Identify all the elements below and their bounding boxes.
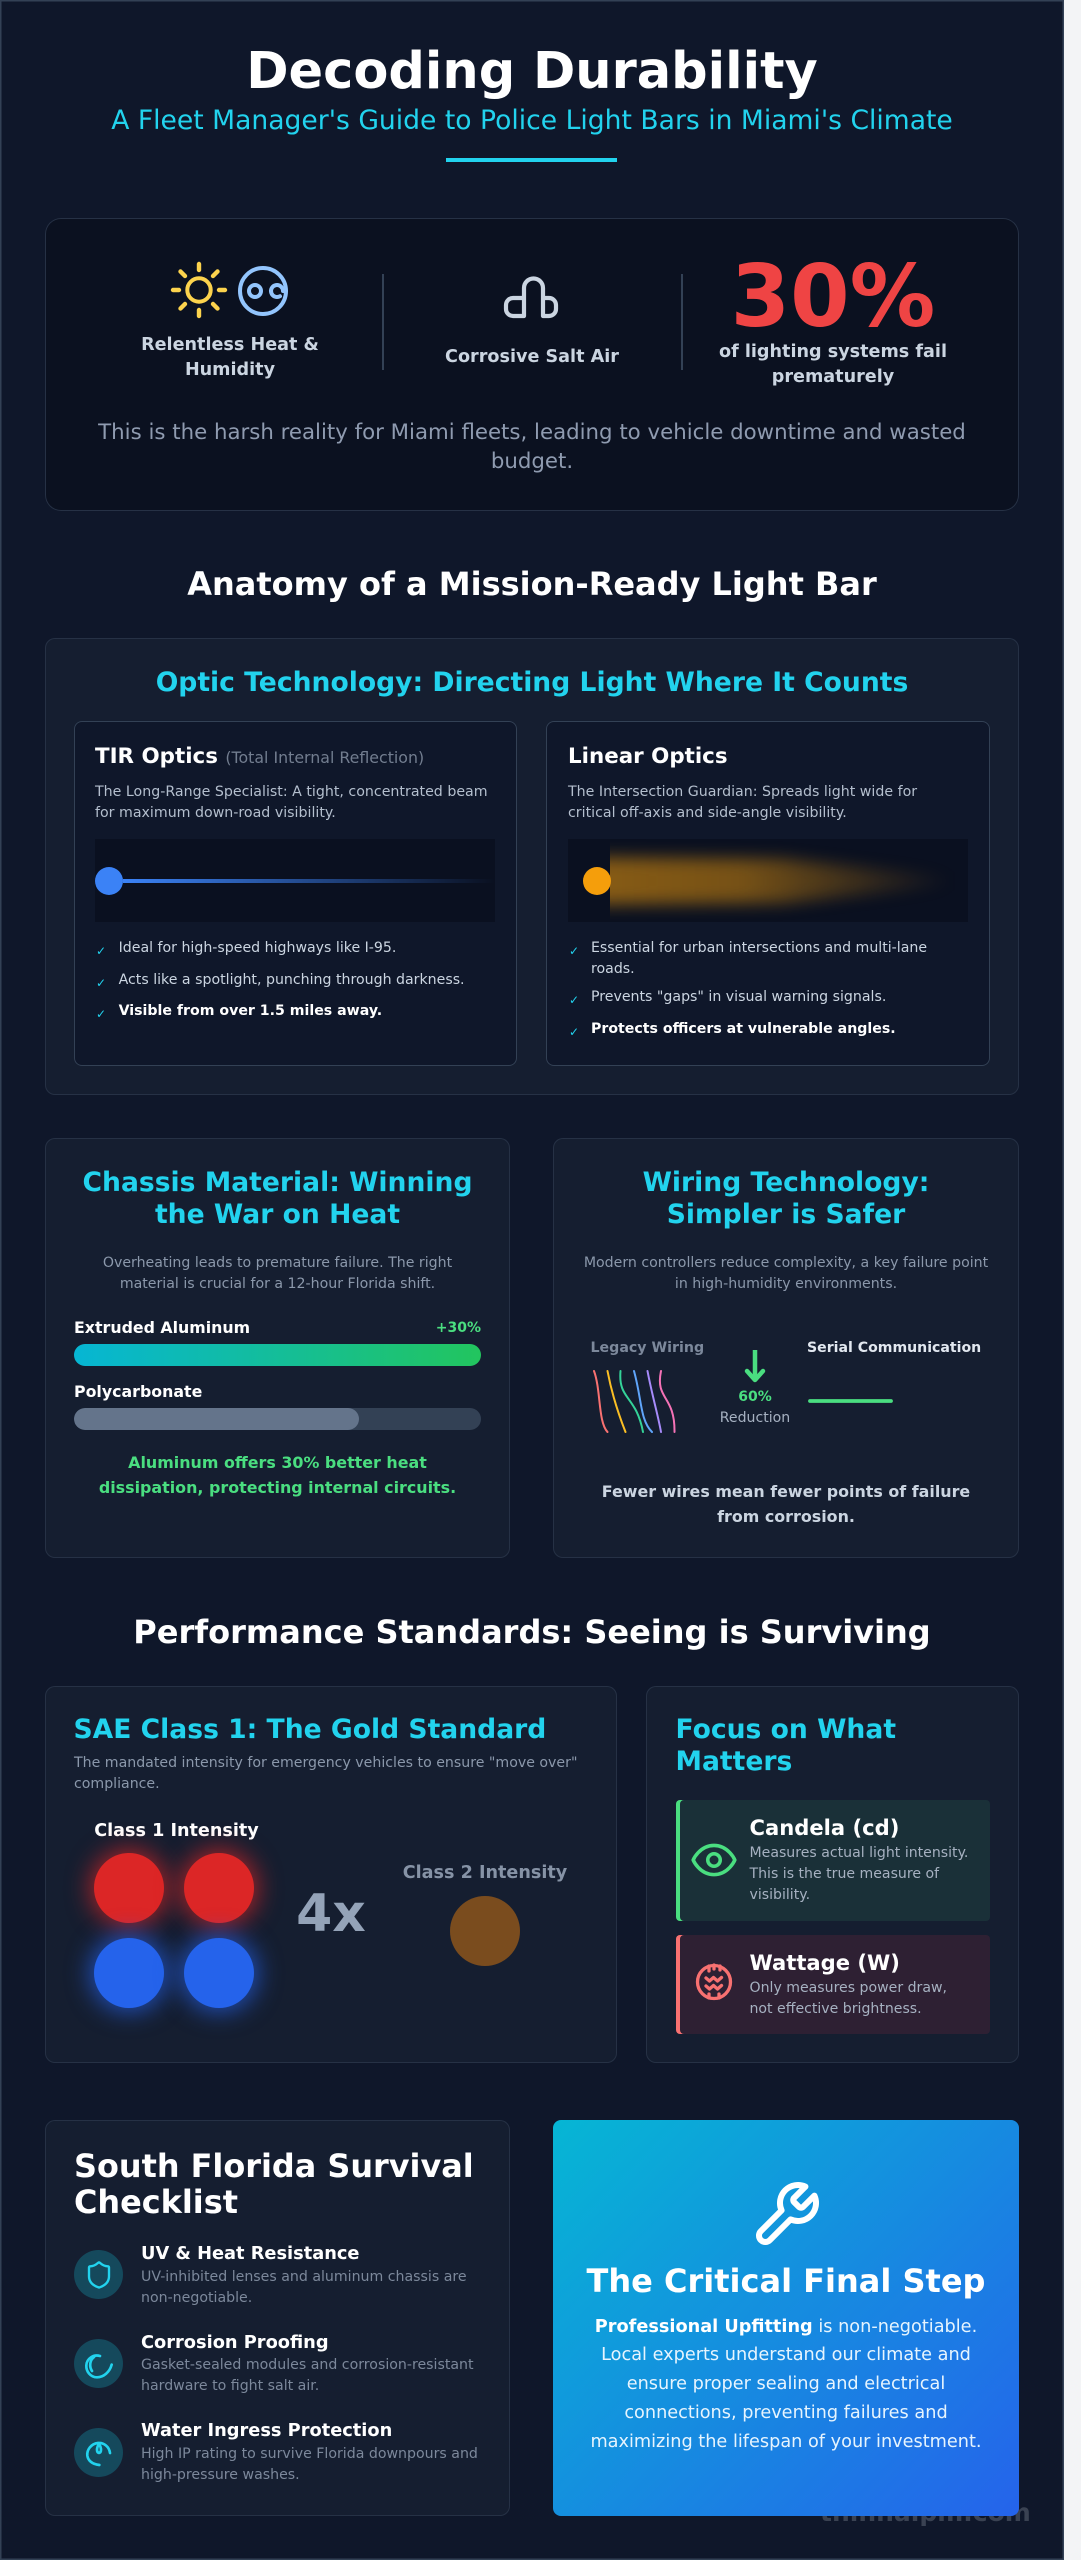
bar label: aluminum: Extruded Aluminum (74, 1318, 250, 1336)
label: heat: Humidity (185, 360, 275, 380)
label: salt: Corrosive Salt Air (445, 347, 619, 367)
multiplier: 4x (296, 1884, 366, 1944)
panel description (74, 1754, 577, 1792)
stat: 60 percent: 60% (738, 1389, 772, 1405)
text: Measures actual light intensity. (750, 1845, 968, 1861)
panel heading: Optic Technology: Directing Light Where It Counts (156, 667, 908, 698)
callout (99, 1453, 456, 1497)
divider (382, 274, 384, 370)
card: linear optics (546, 720, 990, 1066)
card description: for maximum down-road visibility. (95, 805, 336, 821)
callout: Fewer wires mean fewer points of failure (602, 1482, 970, 1501)
card description: critical off-axis and side-angle visibility. (568, 805, 847, 821)
light: class 2 (450, 1896, 520, 1966)
beam diagram: narrow (95, 839, 495, 922)
light group: class 1 (74, 1832, 274, 2028)
stat: 30 percent: 30% (731, 248, 935, 346)
text: UV: non-negotiable. (141, 2290, 252, 2306)
text: UV (141, 2269, 467, 2306)
panel description: material is crucial for a 12-hour Florida shift. (120, 1276, 435, 1292)
panel: critical final step (553, 2120, 1019, 2516)
check: ✓ (569, 993, 579, 1007)
text: corrosion: Gasket-sealed modules and corrosion-resistant (141, 2357, 474, 2373)
card: candela (676, 1800, 990, 1921)
panel heading: The Critical Final Step (587, 2262, 985, 2300)
watermark: thinhaipm.com (820, 2498, 1031, 2527)
check list (569, 940, 927, 1039)
card description (568, 784, 918, 821)
title: water: Water Ingress Protection (141, 2420, 392, 2441)
check: ✓ (96, 944, 106, 958)
panel heading (676, 1714, 896, 1777)
panel: wiring technology (553, 1138, 1019, 1558)
panel heading: Focus on What (676, 1714, 896, 1745)
panel heading: Matters (676, 1746, 792, 1777)
panel heading: Chassis Material: Winning (82, 1167, 472, 1198)
text: not effective brightness. (750, 2001, 922, 2017)
item: Prevents "gaps" in visual warning signals. (591, 989, 886, 1005)
check: ✓ (569, 944, 579, 958)
label: class 2: Class 2 Intensity (403, 1863, 567, 1883)
bar value: +30% (436, 1320, 481, 1336)
bar label: polycarbonate: Polycarbonate (74, 1382, 202, 1400)
label: serial communication: Serial Communication (807, 1340, 981, 1356)
panel: chassis material (45, 1138, 510, 1558)
text: water: high-pressure washes. (141, 2467, 300, 2483)
item: Essential for urban intersections and multi-lane (591, 940, 927, 956)
item: Visible from over 1.5 miles away. (119, 1003, 382, 1019)
panel: SAE class 1 (45, 1686, 617, 2063)
blue light (94, 1938, 164, 2008)
panel description: Modern controllers reduce complexity, a key failure point (584, 1255, 988, 1271)
panel heading: South Florida Survival (74, 2147, 474, 2185)
panel heading: SAE Class 1: The Gold Standard (74, 1714, 546, 1745)
card title: TIR Optics (Total Internal Reflection) (95, 744, 424, 769)
text (750, 1980, 947, 2017)
blue light (184, 1938, 254, 2008)
divider (681, 274, 682, 370)
red light (184, 1853, 254, 1923)
heading: performance: Performance Standards: Seeing is Surviving (133, 1613, 931, 1651)
body text: maximizing the lifespan of your investment. (590, 2432, 982, 2452)
check: ✓ (96, 1007, 106, 1021)
summary text (98, 420, 966, 474)
heading: anatomy: Anatomy of a Mission-Ready Light Bar (187, 565, 877, 603)
check: ✓ (569, 1025, 579, 1039)
icon: salt air (504, 276, 558, 318)
label: legacy wiring: Legacy Wiring (590, 1340, 704, 1356)
body text: ensure proper sealing and electrical (627, 2374, 945, 2394)
label: class 1: Class 1 Intensity (94, 1821, 259, 1841)
stat caption (719, 342, 947, 386)
check list (96, 940, 465, 1021)
arrow: reduction (747, 1350, 763, 1380)
callout: from corrosion. (717, 1507, 855, 1526)
item: roads. (591, 961, 635, 977)
text: corrosion (141, 2357, 474, 2394)
panel: focus on what matters (646, 1686, 1019, 2063)
card title: Linear Optics (568, 744, 728, 769)
summary text: budget. (491, 448, 573, 474)
panel heading (74, 2147, 474, 2221)
body text: Professional Upfitting is non-negotiable. (595, 2316, 977, 2336)
card: TIR optics (74, 720, 517, 1066)
title: Decoding Durability (246, 42, 818, 101)
icon: eye (691, 1844, 737, 1876)
card: wattage (676, 1935, 990, 2034)
check: ✓ (96, 976, 106, 990)
title: UV: UV & Heat Resistance (141, 2243, 360, 2264)
serial line (810, 1399, 891, 1403)
icon: wattage (696, 1963, 732, 2000)
panel heading (82, 1167, 472, 1230)
text: Only measures power draw, (750, 1980, 947, 1996)
legacy wires (594, 1371, 675, 1432)
panel heading: the War on Heat (155, 1199, 400, 1230)
callout (602, 1482, 970, 1526)
card description: The Intersection Guardian: Spreads light wide for (568, 784, 917, 800)
stat caption: Reduction (720, 1410, 790, 1426)
bar: polycarbonate (74, 1408, 481, 1430)
accent line (446, 158, 617, 162)
panel description: The mandated intensity for emergency vehicles to ensure "move over" (74, 1754, 577, 1770)
subtitle: A Fleet Manager's Guide to Police Light Bars in Miami's Climate (111, 104, 953, 136)
panel: optic technology (45, 638, 1019, 1095)
icon: sun and humidity (170, 262, 288, 318)
text: This is the true measure of (750, 1866, 939, 1882)
stat caption: of lighting systems fail (719, 342, 947, 362)
panel description (103, 1255, 452, 1292)
icon: shield (74, 2250, 123, 2299)
title: Wattage (W) (750, 1950, 900, 1975)
text: UV: UV-inhibited lenses and aluminum chassis are (141, 2269, 467, 2285)
red light (94, 1853, 164, 1923)
beam diagram: wide (568, 839, 968, 922)
icon: water ring (74, 2428, 123, 2477)
body text (590, 2316, 982, 2452)
label: heat (141, 334, 319, 380)
icon: wrench (756, 2182, 819, 2245)
label: heat: Relentless Heat & (141, 334, 319, 354)
text: corrosion: hardware to fight salt air. (141, 2378, 319, 2394)
panel heading: Simpler is Safer (667, 1199, 905, 1230)
beam (610, 846, 926, 916)
panel heading: Wiring Technology: (643, 1167, 929, 1198)
panel: harsh reality (45, 218, 1019, 511)
panel heading (643, 1167, 929, 1230)
panel description: Overheating leads to premature failure. The right (103, 1255, 452, 1271)
beam (123, 879, 495, 883)
text (749, 1845, 968, 1903)
text: water: High IP rating to survive Florida downpours and (141, 2446, 478, 2462)
text: water (141, 2446, 478, 2483)
item: Protects officers at vulnerable angles. (591, 1021, 896, 1037)
panel description (584, 1255, 988, 1292)
callout: Aluminum offers 30% better heat (128, 1453, 427, 1472)
item: Ideal for high-speed highways like I-95. (119, 940, 396, 956)
title: Candela (cd) (750, 1815, 899, 1840)
panel: survival checklist (45, 2120, 510, 2516)
card description: The Long-Range Specialist: A tight, concentrated beam (95, 784, 488, 800)
light source (95, 867, 123, 895)
text: visibility. (750, 1887, 810, 1903)
title: corrosion: Corrosion Proofing (141, 2332, 329, 2353)
summary text: This is the harsh reality for Miami fleets, leading to vehicle downtime and wasted (98, 420, 966, 444)
body text: Local experts understand our climate and (601, 2345, 971, 2365)
icon: corrosion swirl (74, 2339, 123, 2388)
bar: aluminum (74, 1344, 481, 1366)
card description (94, 784, 488, 821)
callout: dissipation, protecting internal circuits. (99, 1478, 456, 1497)
body text: connections, preventing failures and (624, 2403, 948, 2423)
item (591, 940, 927, 977)
stat caption: prematurely (772, 366, 894, 386)
item: Acts like a spotlight, punching through darkness. (119, 972, 465, 988)
header (111, 42, 953, 162)
light source (583, 867, 611, 895)
diagram: wires and arrow (593, 1350, 893, 1433)
panel description: compliance. (74, 1776, 160, 1792)
panel heading: Checklist (74, 2183, 238, 2221)
panel description: in high-humidity environments. (675, 1276, 897, 1292)
